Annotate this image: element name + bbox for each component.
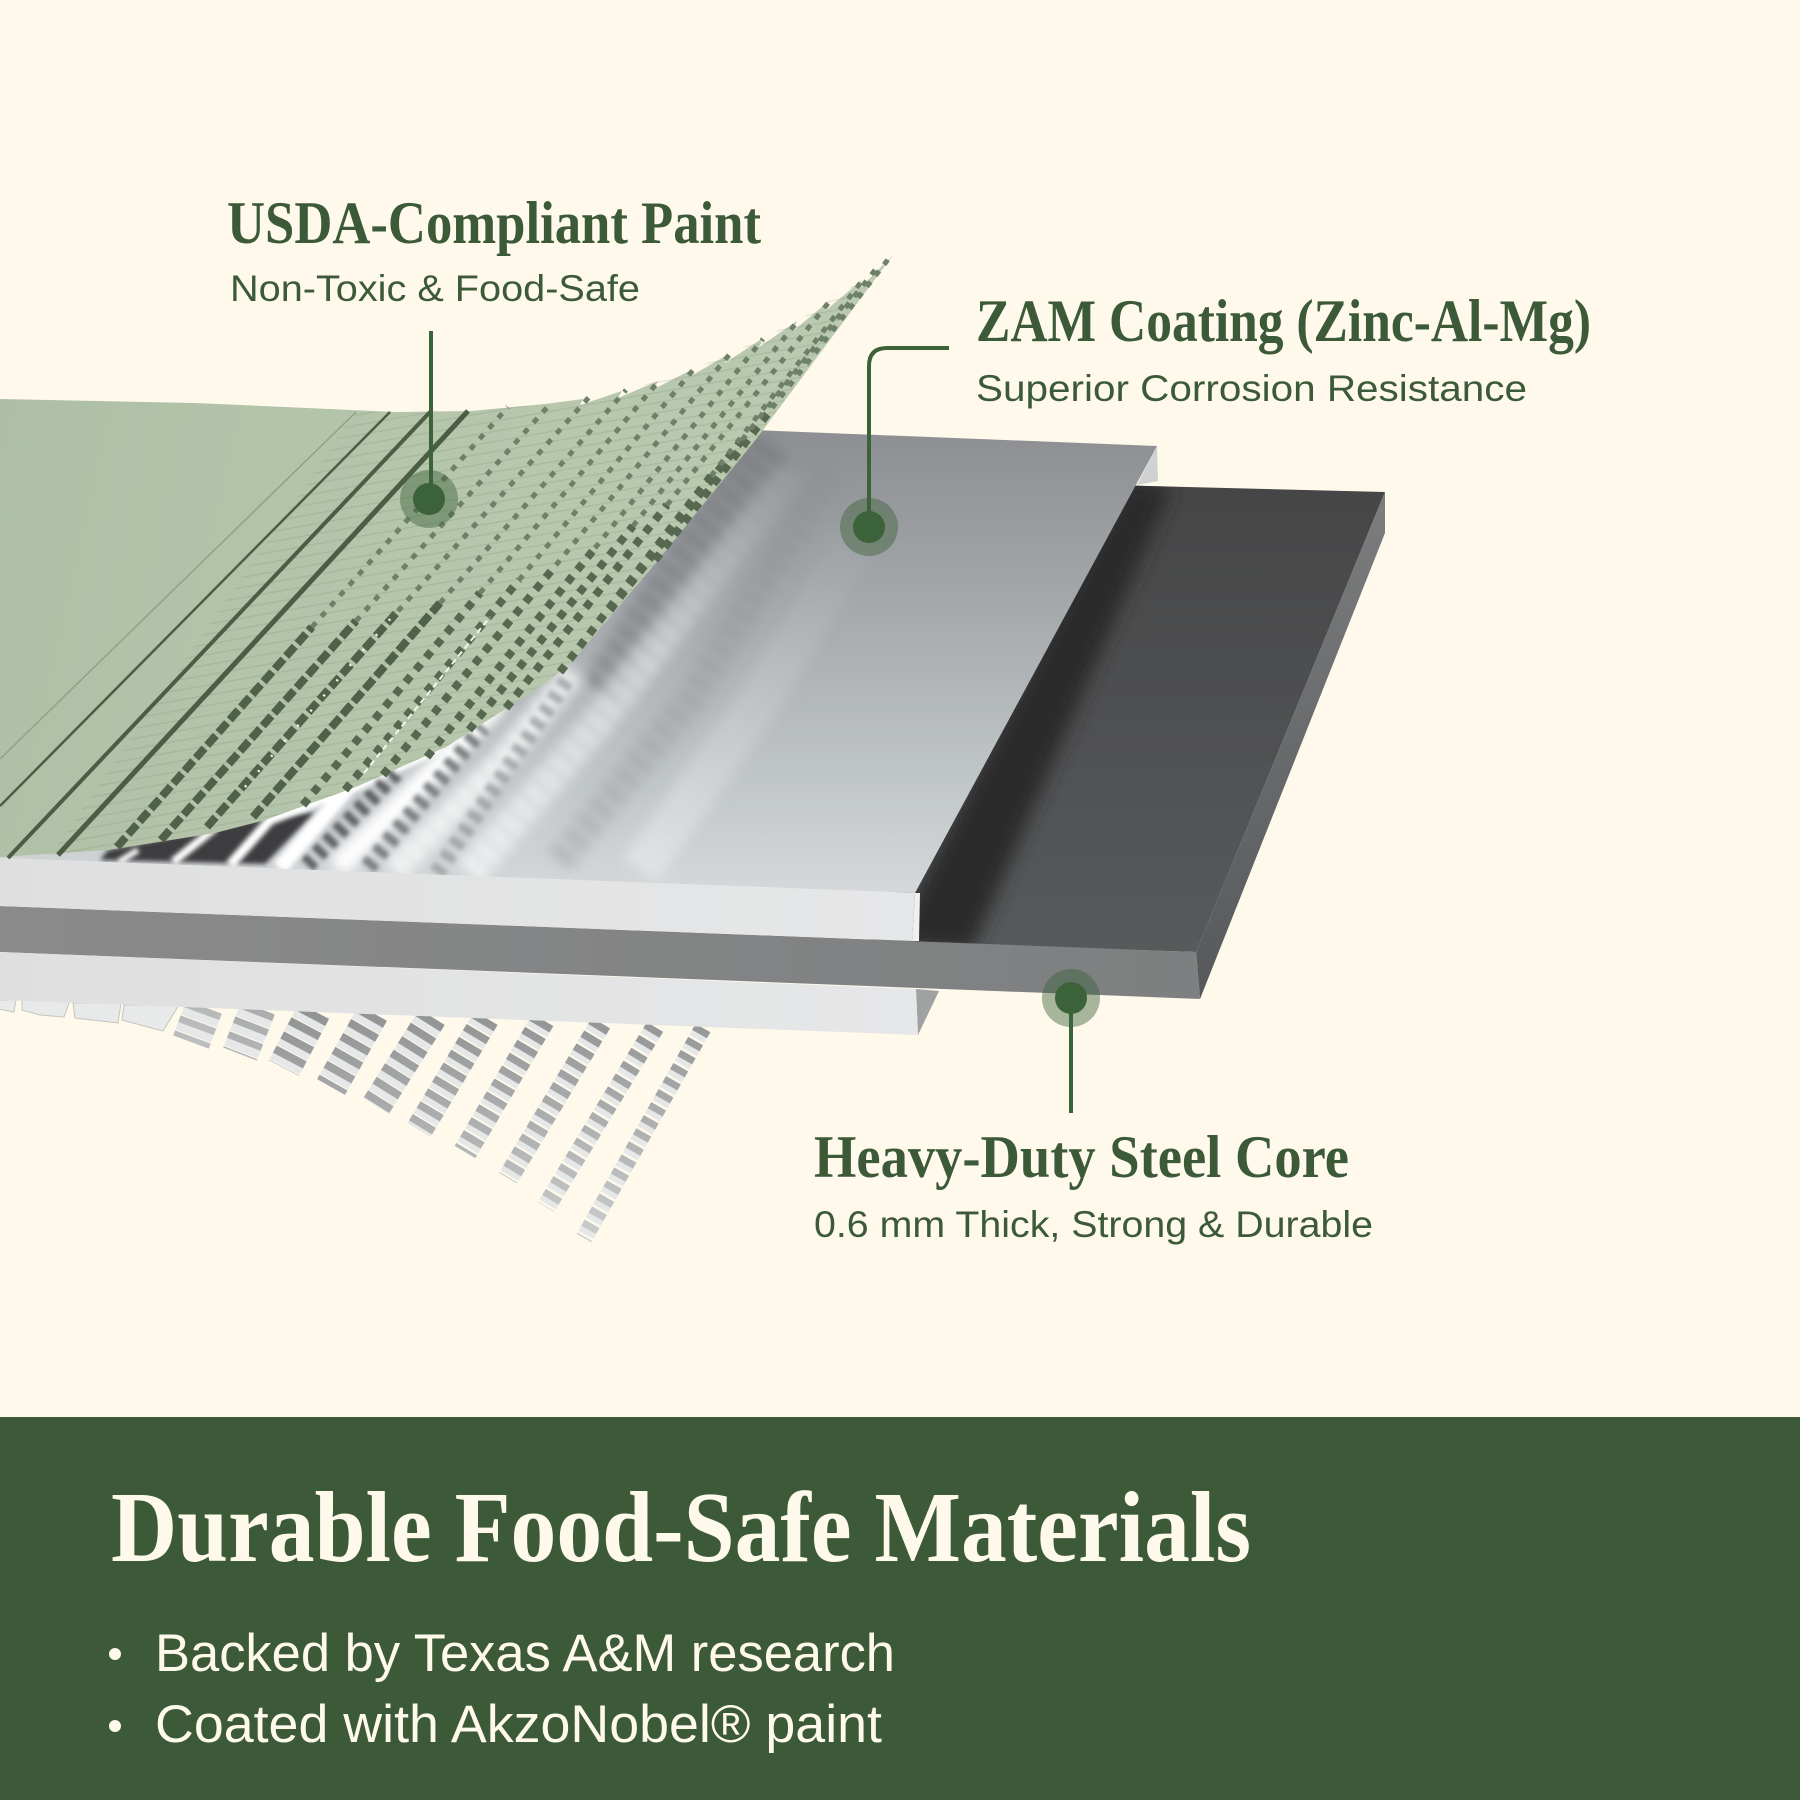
callout: ZAM coating [840,288,1591,556]
callout: heavy-duty steel core: Heavy-Duty Steel Core [814,1124,1349,1190]
callout: USDA-compliant paint [227,190,761,528]
bullet list: Backed by Texas A&M research [155,1624,895,1683]
callout: ZAM coating: Superior Corrosion Resistance [976,368,1527,409]
callout: heavy-duty steel core [814,969,1373,1245]
layer: underside strips of the lower coating [0,1000,703,1238]
footer heading: Durable Food-Safe Materials [111,1471,1251,1583]
callout: USDA-compliant paint: USDA-Compliant Paint [227,190,761,256]
callout: heavy-duty steel core: 0.6 mm Thick, Strong & Durable [814,1204,1373,1245]
tile faces, white part [191,1007,703,1238]
tile faces, shaded part [191,1007,703,1238]
light cracks between strips [245,610,490,787]
tile gaps: upper rows [312,257,890,627]
callout: ZAM coating: ZAM Coating (Zinc-Al-Mg) [976,288,1591,354]
layer: lower coating plate [0,952,939,1035]
bullet list: Coated with AkzoNobel® paint [155,1695,882,1754]
layer: heavy-duty steel core [0,480,1385,999]
layer: USDA-compliant paint strips [0,255,893,858]
reflections on ZAM surface [100,440,880,873]
tile gaps: middle rows [303,408,772,805]
tile gaps: lower rows [117,603,440,847]
layer: ZAM coating plate [0,424,1158,941]
footer panel [0,1417,1800,1800]
bullet list [109,1624,895,1754]
callout: USDA-compliant paint: Non-Toxic & Food-Safe [230,268,640,309]
